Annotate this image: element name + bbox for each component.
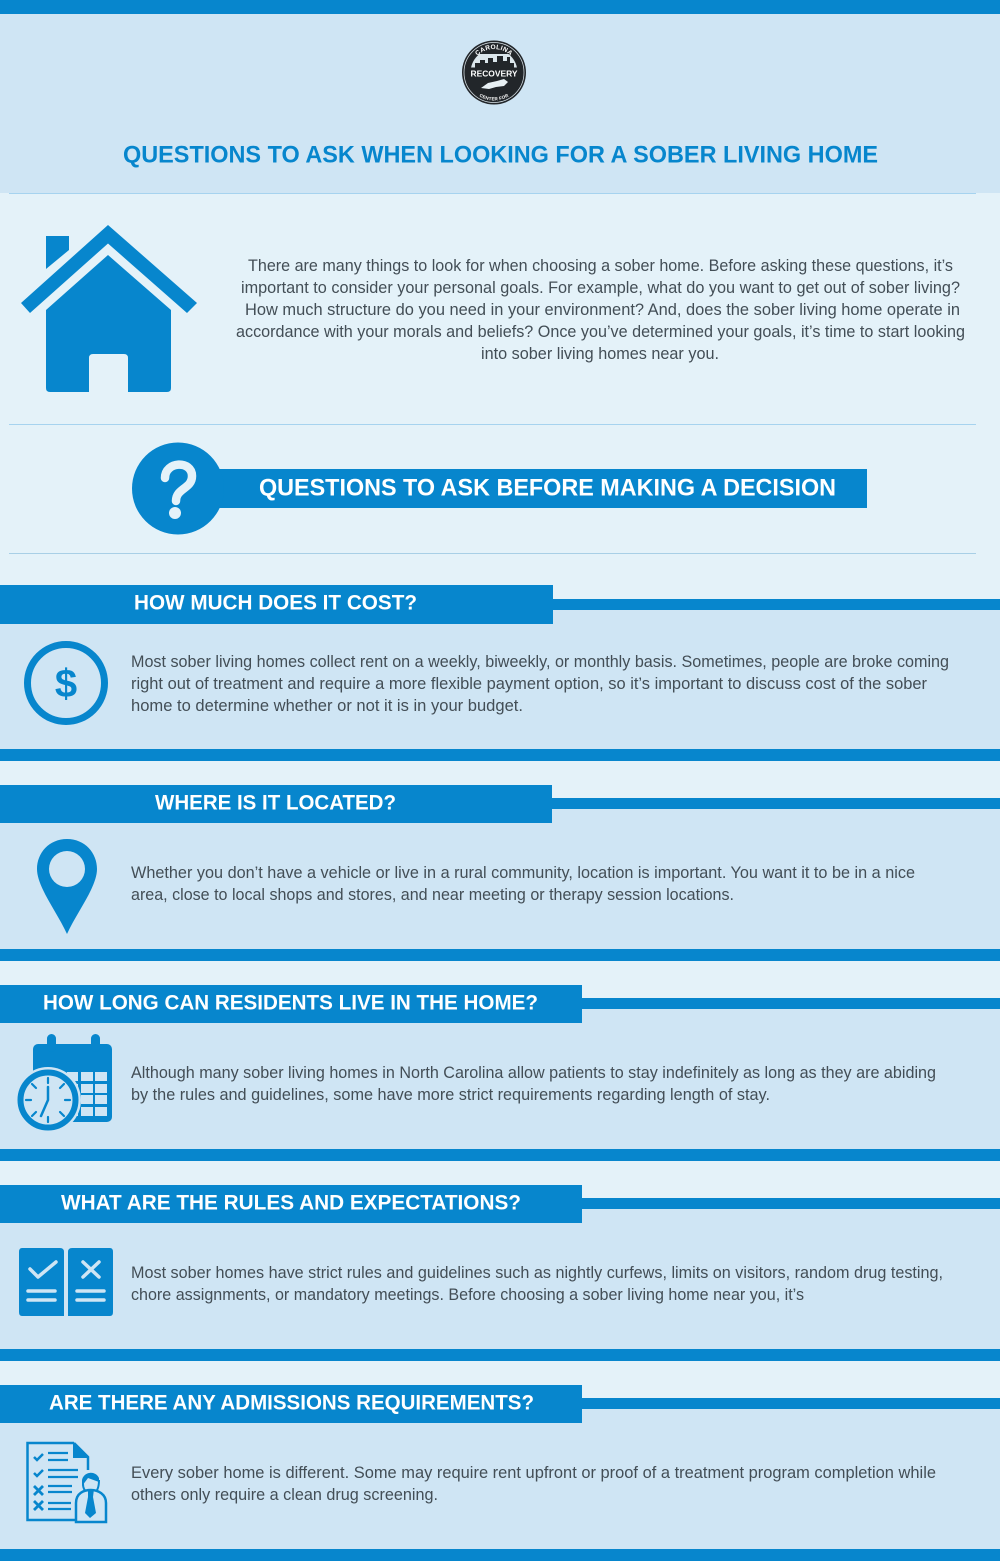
- heading: location: WHERE IS IT LOCATED?: [155, 792, 396, 814]
- text: length of stay: by the rules and guidelines, some have more strict requirements regarding length of stay.: [131, 1086, 770, 1104]
- text: admissions: others only require a clean drug screening.: [131, 1486, 438, 1504]
- text: cost: Most sober living homes collect rent on a weekly, biweekly, or monthly basis. Sometimes, people are broke coming: [131, 653, 949, 671]
- header panel: [0, 0, 1000, 193]
- logo: Carolina Recovery Centers: [462, 40, 526, 104]
- text: rules: chore assignments, or mandatory meetings. Before choosing a sober living home near you, it’s: [131, 1286, 804, 1304]
- title: QUESTIONS TO ASK WHEN LOOKING FOR A SOBER LIVING HOME: [123, 142, 878, 168]
- icon: calendar and clock: [15, 1034, 112, 1133]
- intro text: important to consider your personal goals. For example, what do you want to get out of sober living?: [241, 279, 960, 297]
- icon: dollar: [28, 644, 104, 722]
- banner: questions to ask before making a decision: [132, 442, 867, 534]
- text: length of stay: Although many sober living homes in North Carolina allow patients to stay indefinitely as long as they are abiding: [131, 1064, 936, 1082]
- banner: questions to ask before making a decision: QUESTIONS TO ASK BEFORE MAKING A DECISION: [259, 474, 836, 502]
- intro text: accordance with your morals and beliefs? Once you’ve determined your goals, it’s time to start looking: [236, 323, 965, 341]
- panel: admissions requirements: [0, 1385, 1000, 1561]
- logo: Carolina Recovery Centers: CAROLINA: [475, 44, 512, 56]
- logo: Carolina Recovery Centers: RECOVERY: [470, 68, 518, 78]
- intro text: How much structure do you need in your environment? And, does the sober living home operate in: [245, 301, 960, 319]
- text: admissions: [131, 1464, 936, 1504]
- text: location: [131, 864, 915, 904]
- heading: rules: WHAT ARE THE RULES AND EXPECTATIONS?: [61, 1192, 521, 1214]
- text: location: area, close to local shops and stores, and near meeting or therapy session locations.: [131, 886, 734, 904]
- heading: length of stay: HOW LONG CAN RESIDENTS LIVE IN THE HOME?: [43, 992, 538, 1014]
- heading: admissions: ARE THERE ANY ADMISSIONS REQUIREMENTS?: [49, 1392, 534, 1414]
- text: rules: Most sober homes have strict rules and guidelines such as nightly curfews, limits on visitors, random drug testing,: [131, 1264, 943, 1282]
- text: cost: right out of treatment and require a more flexible payment option, so it’s important to discuss cost of the sober: [131, 675, 927, 693]
- icon: checklist with person: [28, 1442, 106, 1522]
- icon: dollar: $: [55, 662, 77, 706]
- panel: how much does it cost: [0, 585, 1000, 761]
- intro text: into sober living homes near you.: [481, 345, 719, 363]
- text: cost: home to determine whether or not it is in your budget.: [131, 697, 523, 715]
- text: length of stay: [131, 1064, 936, 1104]
- panel: how long can residents live in the home: [0, 985, 1000, 1161]
- logo: Carolina Recovery Centers: CENTER FOR: [480, 94, 509, 100]
- heading: cost: HOW MUCH DOES IT COST?: [134, 592, 417, 614]
- icon: open book with check and cross: [19, 1248, 113, 1316]
- intro text: There are many things to look for when choosing a sober home. Before asking these questions, it’s: [248, 257, 953, 275]
- intro text: [236, 257, 965, 363]
- text: admissions: Every sober home is different. Some may require rent upfront or proof of a treatment program completion while: [131, 1464, 936, 1482]
- panel: where is it located: [0, 785, 1000, 961]
- text: cost: [131, 653, 949, 715]
- text: rules: [131, 1264, 943, 1304]
- icon: house: [21, 225, 197, 392]
- panel: rules and expectations: [0, 1185, 1000, 1361]
- text: location: Whether you don’t have a vehicle or live in a rural community, location is important. You want it to be in a nice: [131, 864, 915, 882]
- icon: map pin: [37, 839, 97, 934]
- icon: question mark: [165, 465, 192, 519]
